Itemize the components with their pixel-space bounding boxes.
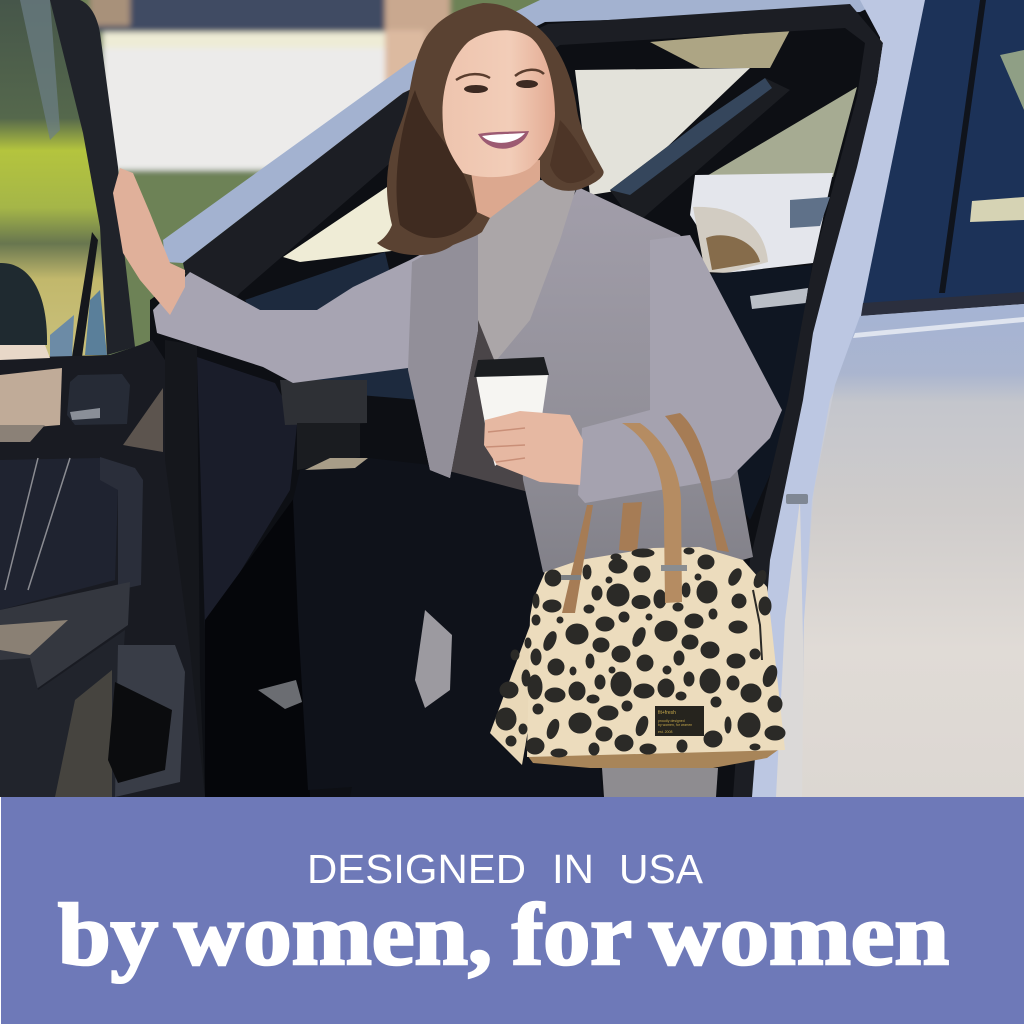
brand label: proudly designed	[658, 719, 685, 723]
coffee cup	[476, 375, 548, 466]
inner garment	[445, 260, 540, 495]
heading: designed in USA: DESIGNED	[307, 846, 526, 892]
heading: designed in USA: USA	[619, 846, 704, 892]
heading: by women, for women	[58, 887, 949, 984]
front handle right	[622, 423, 682, 603]
armrest	[0, 582, 130, 690]
rear door inner and handle	[700, 265, 812, 520]
dashboard	[245, 252, 420, 400]
eyebrows	[456, 70, 544, 80]
cream sunlight on trim	[0, 345, 50, 360]
eyes	[464, 85, 488, 93]
brand label: est. 2008	[658, 730, 672, 734]
spots	[496, 548, 785, 757]
open car door: inner panel	[0, 340, 205, 797]
sill bar	[861, 292, 1024, 316]
headliner	[650, 30, 790, 68]
cardigan body	[495, 187, 780, 600]
background: outdoor scene	[0, 0, 590, 360]
windshield	[575, 68, 750, 195]
smile	[478, 131, 529, 149]
heading: by women, for women: for	[512, 887, 632, 984]
lower door	[0, 630, 125, 797]
heading: by women, for women: women,	[174, 887, 492, 984]
reflection	[1000, 50, 1024, 110]
right sleeve	[578, 235, 782, 503]
left front shading	[408, 225, 478, 478]
face	[442, 30, 555, 177]
rear view	[700, 87, 857, 180]
rear window	[863, 0, 1024, 304]
door column	[165, 340, 205, 797]
bag body	[527, 547, 785, 757]
pillar	[50, 0, 135, 355]
front handle left	[562, 505, 593, 613]
raised hand	[113, 168, 185, 315]
door handle	[67, 374, 130, 425]
heading: designed in USA: IN	[552, 846, 594, 892]
seat side panel	[197, 357, 297, 630]
brand label: by women, for women	[658, 723, 692, 727]
base band	[527, 750, 778, 768]
console	[280, 380, 367, 425]
mirror	[0, 263, 47, 345]
knee sunlight	[305, 458, 368, 470]
car body: rear pillar and panels	[752, 0, 1024, 797]
strut	[72, 232, 98, 357]
footwell	[205, 490, 310, 797]
back handle left	[619, 502, 642, 552]
side gusset	[490, 620, 540, 765]
rubber seal	[183, 4, 883, 797]
upholstery	[0, 458, 118, 610]
car body base	[800, 0, 1024, 797]
open car door: window and pillar	[0, 0, 135, 358]
heading: designed in USA	[307, 846, 704, 892]
back handle right	[665, 413, 729, 552]
brand label	[655, 706, 704, 736]
woman	[113, 3, 782, 797]
car interior	[150, 0, 880, 800]
heading: by women, for women: women	[649, 887, 949, 984]
brand label: fit+fresh	[658, 710, 676, 716]
cardigan left front and arm	[153, 225, 478, 478]
hair	[377, 3, 604, 255]
holding hand	[484, 411, 583, 485]
front windshield lower	[283, 187, 400, 262]
neck	[470, 160, 540, 218]
sunlit triangle	[123, 388, 163, 452]
car door frame	[163, 0, 885, 797]
pedal	[258, 680, 302, 709]
silver pillar	[752, 0, 930, 797]
speaker	[108, 682, 172, 783]
banner background	[1, 797, 1024, 1024]
handbag	[490, 413, 785, 768]
B pillar	[610, 78, 790, 225]
speaker plate	[115, 645, 185, 797]
leg hem	[602, 768, 718, 797]
heading: by women, for women: by	[58, 887, 158, 984]
handle clasps	[561, 575, 581, 580]
silver door	[802, 304, 1024, 797]
pull handle	[100, 457, 143, 590]
window pillar line	[939, 0, 986, 293]
silver strip	[163, 0, 885, 263]
wing mirror	[693, 207, 768, 273]
turtleneck	[478, 180, 578, 362]
trousers	[293, 457, 602, 797]
drape of cardigan	[415, 610, 452, 708]
pocket zipper	[753, 590, 762, 660]
